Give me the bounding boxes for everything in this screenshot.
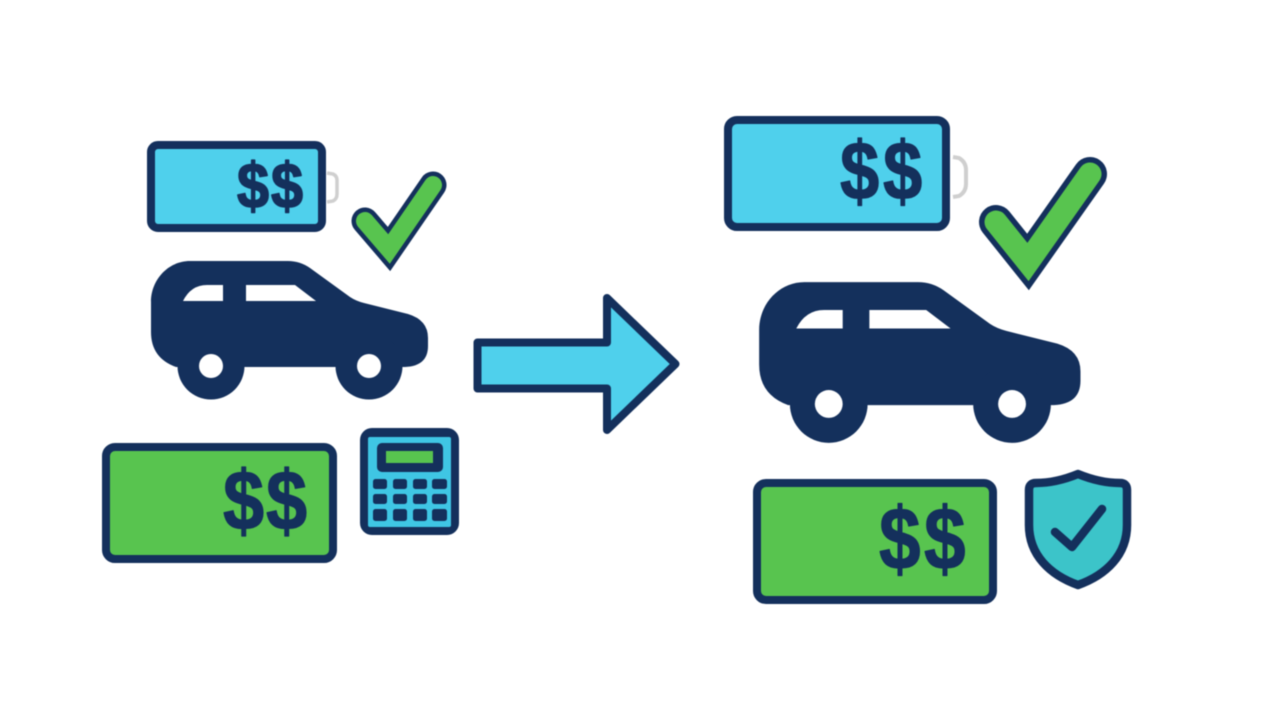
panel: before [106, 145, 459, 559]
price tag: blue $$ battery card: $$ [237, 150, 303, 221]
price tag: green $$ card [106, 447, 333, 559]
price tag: blue $$ battery card [728, 120, 966, 227]
icon: car [151, 261, 428, 400]
icon: green check mark [996, 174, 1090, 262]
panel: after [728, 120, 1127, 600]
icon: green check mark [365, 185, 433, 249]
icon: car [759, 282, 1080, 443]
icon: shield with check [1029, 474, 1127, 585]
price tag: blue $$ battery card [151, 145, 337, 228]
price tag: green $$ card: $$ [879, 490, 966, 588]
arrow: before to after [478, 298, 676, 430]
price tag: blue $$ battery card: $$ [840, 125, 922, 218]
icon: calculator [360, 428, 459, 535]
price tag: green $$ card: $$ [223, 453, 307, 548]
price tag: green $$ card [757, 483, 993, 600]
